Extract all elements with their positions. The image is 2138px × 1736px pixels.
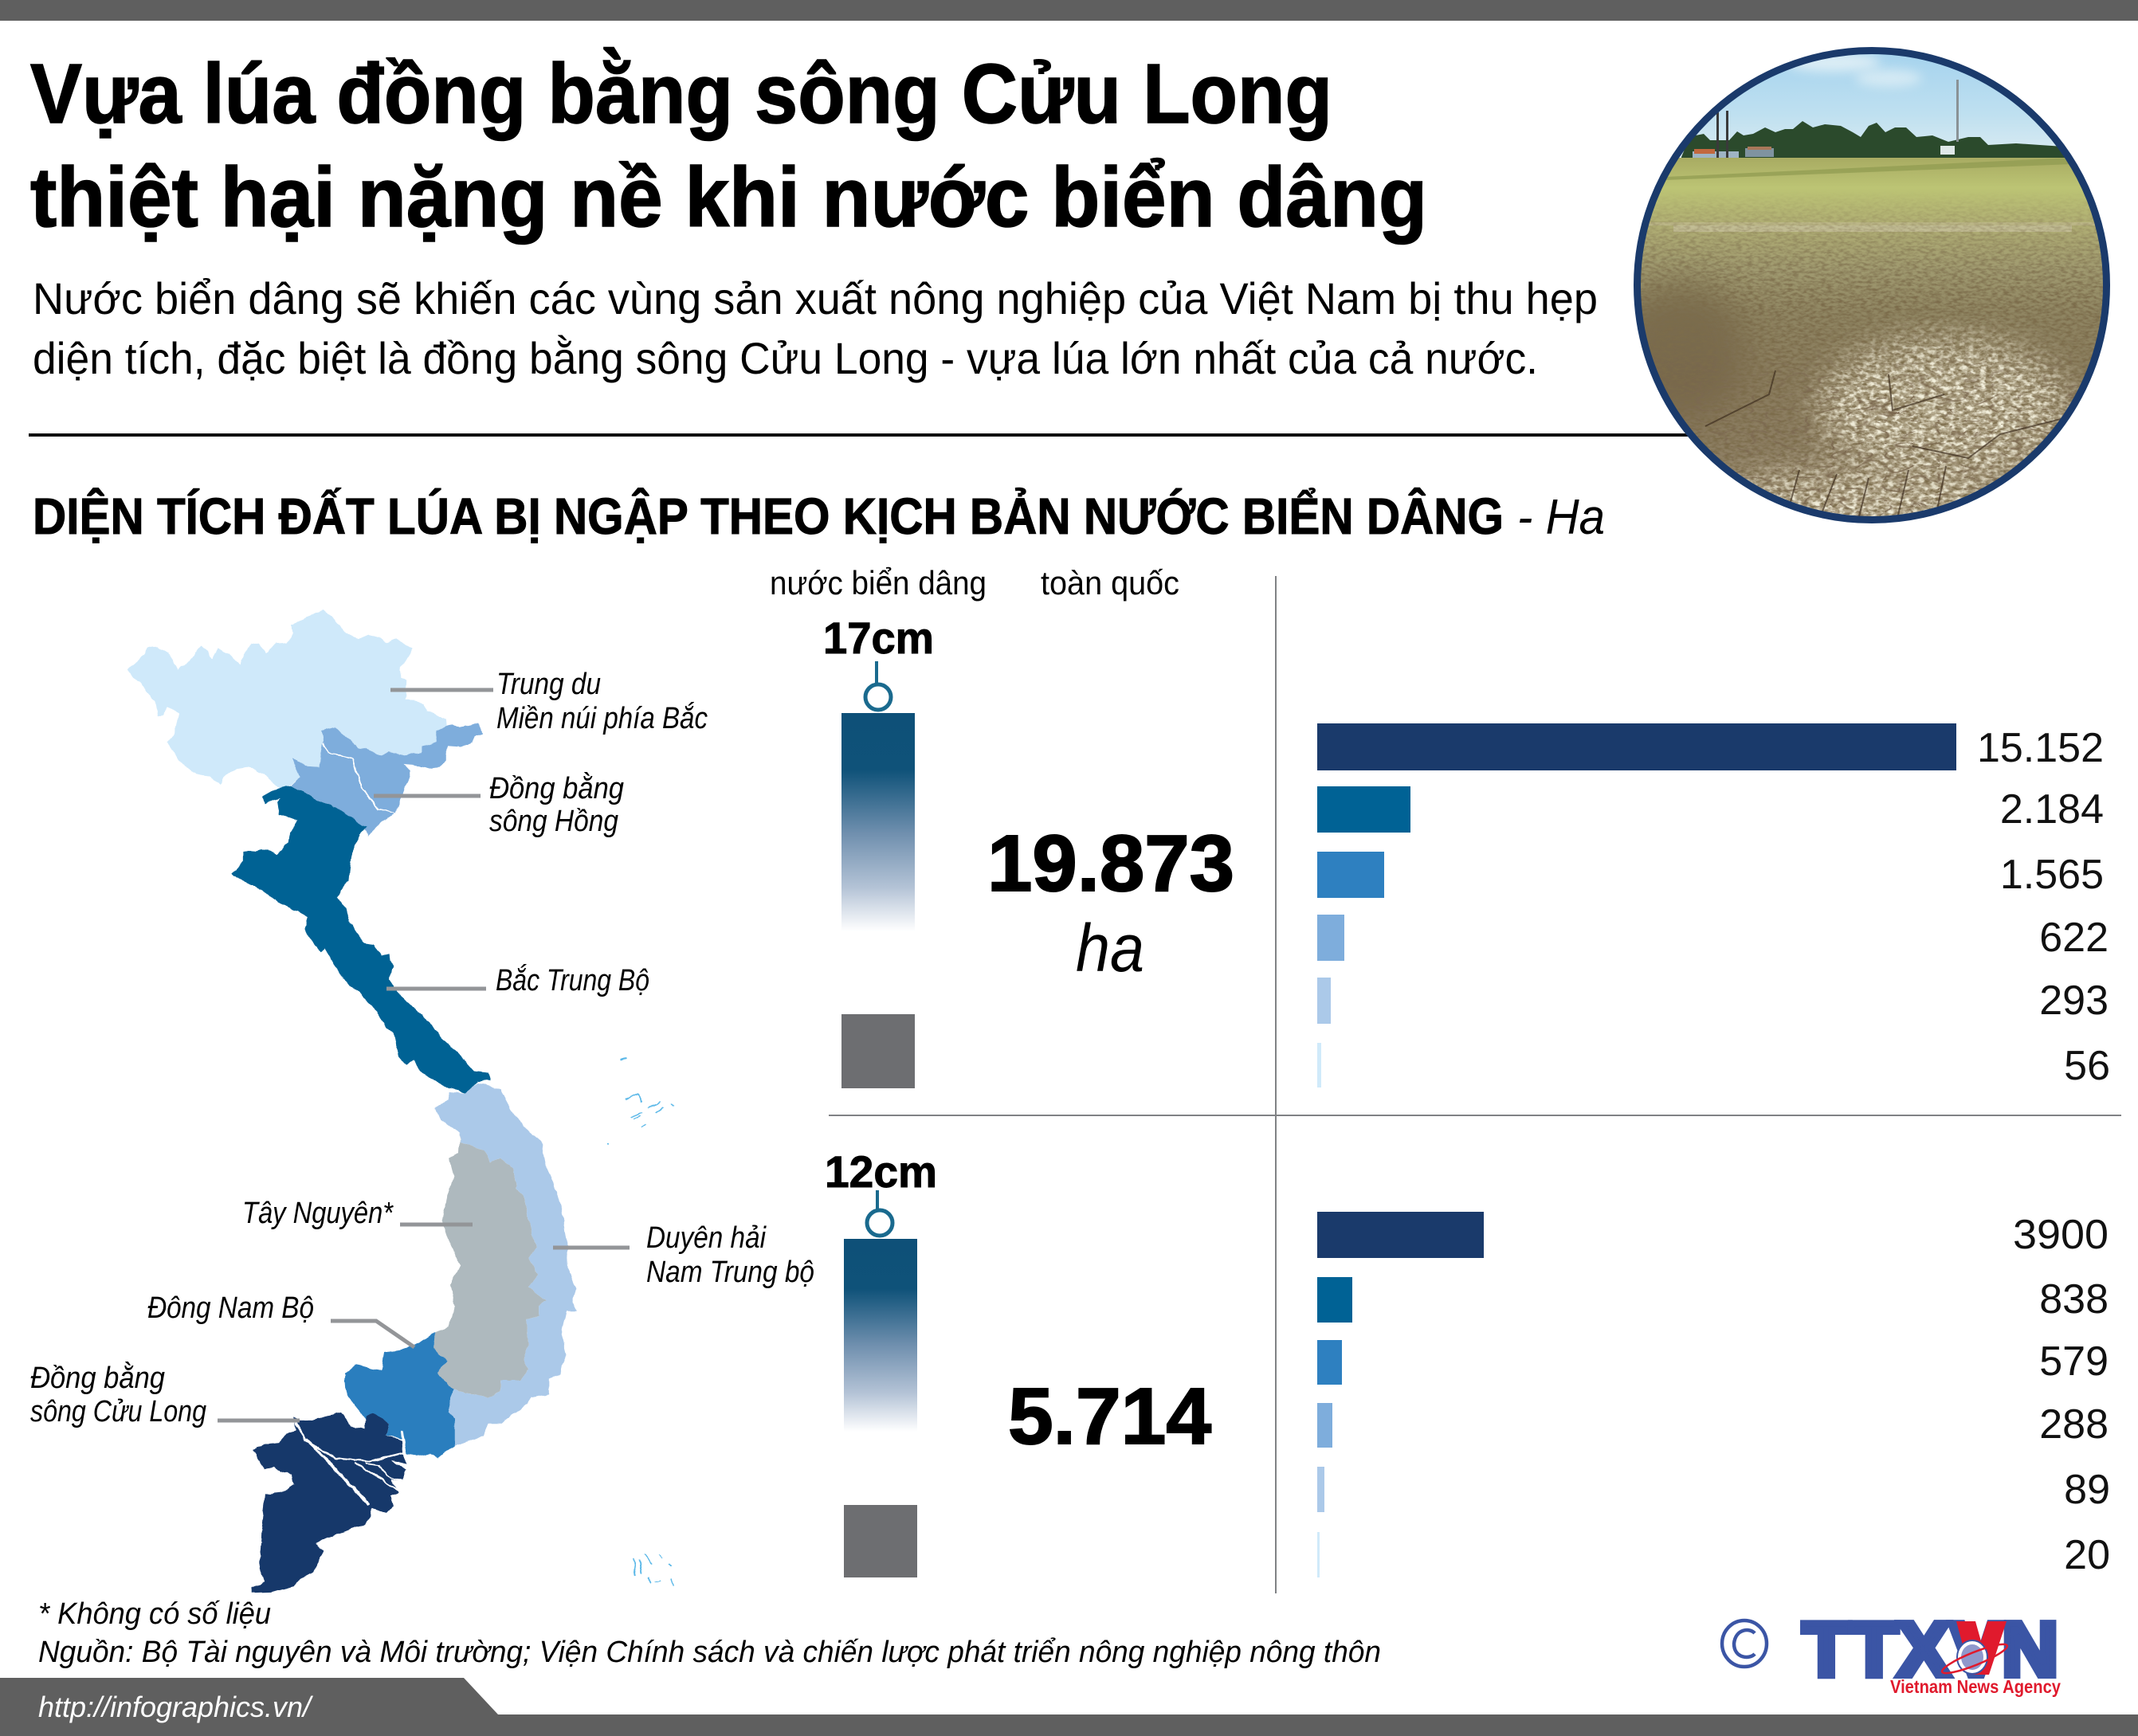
footnote and source: * Không có số liệu bbox=[38, 1597, 271, 1631]
title: Vựa lúa đồng bằng sông Cửu Long bbox=[30, 47, 1332, 141]
website url: http://infographics.vn/ bbox=[38, 1691, 314, 1723]
region: Southeast bbox=[344, 1332, 455, 1458]
intro text: diện tích, đặc biệt là đồng bằng sông Cửu Long - vựa lúa lớn nhất của cả nước. bbox=[33, 333, 1538, 383]
bar chart: 12cm by region bbox=[1317, 1212, 2110, 1578]
label: Đồng bằng sông Cửu Long bbox=[30, 1361, 300, 1428]
logo: TTXVN Vietnam News Agency: TTXVN bbox=[1803, 1607, 2058, 1692]
title: thiệt hại nặng nề khi nước biển dâng bbox=[30, 151, 1427, 245]
bar chart: 17cm by region: 56 bbox=[2064, 1043, 2110, 1089]
scenario 17cm: water gauge: 17cm bbox=[823, 613, 934, 663]
bar chart: 17cm by region: 1.565 bbox=[2000, 852, 2104, 898]
bar chart: 12cm by region: 579 bbox=[2039, 1338, 2109, 1385]
total 5.714: 5.714 bbox=[1008, 1372, 1211, 1461]
footnote and source bbox=[38, 1597, 1381, 1669]
label: Trung du Miền núi phía Bắc: Trung du bbox=[496, 668, 601, 701]
bar chart: 12cm by region: 288 bbox=[2039, 1401, 2109, 1448]
label: Đồng bằng sông Hồng bbox=[374, 771, 624, 838]
label: Đồng bằng sông Hồng: sông Hồng bbox=[489, 805, 618, 838]
bar chart: 17cm by region bbox=[1317, 723, 2110, 1089]
scenario 12cm: water gauge: 12cm bbox=[825, 1146, 937, 1197]
total 19.873 ha: 19.873 bbox=[987, 819, 1234, 908]
section heading: DIỆN TÍCH ĐẤT LÚA BỊ NGẬP THEO KỊCH BẢN NƯỚC BIỂN DÂNG bbox=[33, 487, 1504, 545]
bar chart: 12cm by region: 20 bbox=[2064, 1532, 2110, 1578]
region: Mekong delta bbox=[252, 1413, 408, 1593]
bar chart: 12cm by region: 838 bbox=[2039, 1276, 2109, 1323]
label: Duyên hải Nam Trung bộ bbox=[553, 1221, 814, 1289]
region: North Central bbox=[232, 786, 490, 1094]
bar chart: 17cm by region: 2.184 bbox=[2000, 786, 2104, 833]
bar chart: 12cm by region: 89 bbox=[2064, 1467, 2110, 1513]
footnote and source: Nguồn: Bộ Tài nguyên và Môi trường; Viện Chính sách và chiến lược phát triển nông nghiệp nông thôn bbox=[38, 1636, 1381, 1669]
label: Duyên hải Nam Trung bộ: Nam Trung bộ bbox=[646, 1256, 814, 1289]
bottom bar bbox=[0, 1678, 2138, 1736]
total 19.873 ha bbox=[987, 819, 1234, 986]
label: Trung du Miền núi phía Bắc bbox=[390, 668, 708, 735]
title bbox=[30, 47, 1427, 245]
label: Tây Nguyên: Tây Nguyên* bbox=[242, 1197, 394, 1230]
region: Red River delta bbox=[291, 723, 484, 837]
label: Đông Nam Bộ: Đông Nam Bộ bbox=[147, 1291, 314, 1325]
label: Đồng bằng sông Hồng: Đồng bằng bbox=[489, 771, 624, 805]
label: Đông Nam Bộ bbox=[147, 1291, 414, 1347]
region: northern midlands and mountains bbox=[128, 609, 447, 788]
label: Đồng bằng sông Cửu Long: Đồng bằng bbox=[30, 1361, 165, 1395]
section heading: - Ha bbox=[1517, 490, 1605, 545]
copyright symbol bbox=[1722, 1620, 1767, 1667]
islands: Truong Sa bbox=[633, 1555, 673, 1586]
column header: nước biển dâng: nước biển dâng bbox=[770, 564, 987, 602]
intro text bbox=[33, 273, 1598, 383]
map of Vietnam regions bbox=[128, 609, 673, 1593]
top bar bbox=[0, 0, 2138, 21]
scenario 17cm: water gauge bbox=[823, 613, 934, 1088]
bar chart: 17cm by region: 293 bbox=[2039, 978, 2109, 1024]
region: Central Highlands bbox=[434, 1133, 547, 1397]
region: South Central Coast bbox=[434, 1084, 577, 1446]
column header: toàn quốc: toàn quốc bbox=[1041, 564, 1179, 602]
photo: cracked dry rice field bbox=[1618, 48, 2112, 547]
total 19.873 ha: ha bbox=[1076, 911, 1144, 986]
label: Bắc Trung Bộ: Bắc Trung Bộ bbox=[496, 963, 649, 997]
scenario 12cm: water gauge bbox=[825, 1146, 937, 1577]
logo: TTXVN Vietnam News Agency: Vietnam News Agency bbox=[1890, 1676, 2061, 1697]
intro text: Nước biển dâng sẽ khiến các vùng sản xuất nông nghiệp của Việt Nam bị thu hẹp bbox=[33, 273, 1598, 323]
bar chart: 17cm by region: 15.152 bbox=[1977, 725, 2104, 771]
islands: Hoang Sa bbox=[607, 1094, 673, 1145]
bar chart: 12cm by region: 3900 bbox=[2013, 1212, 2109, 1258]
label: Đồng bằng sông Cửu Long: sông Cửu Long bbox=[30, 1395, 206, 1428]
label: Duyên hải Nam Trung bộ: Duyên hải bbox=[646, 1221, 767, 1255]
bar chart: 17cm by region: 622 bbox=[2039, 915, 2109, 961]
label: Trung du Miền núi phía Bắc: Miền núi phía Bắc bbox=[496, 701, 708, 735]
